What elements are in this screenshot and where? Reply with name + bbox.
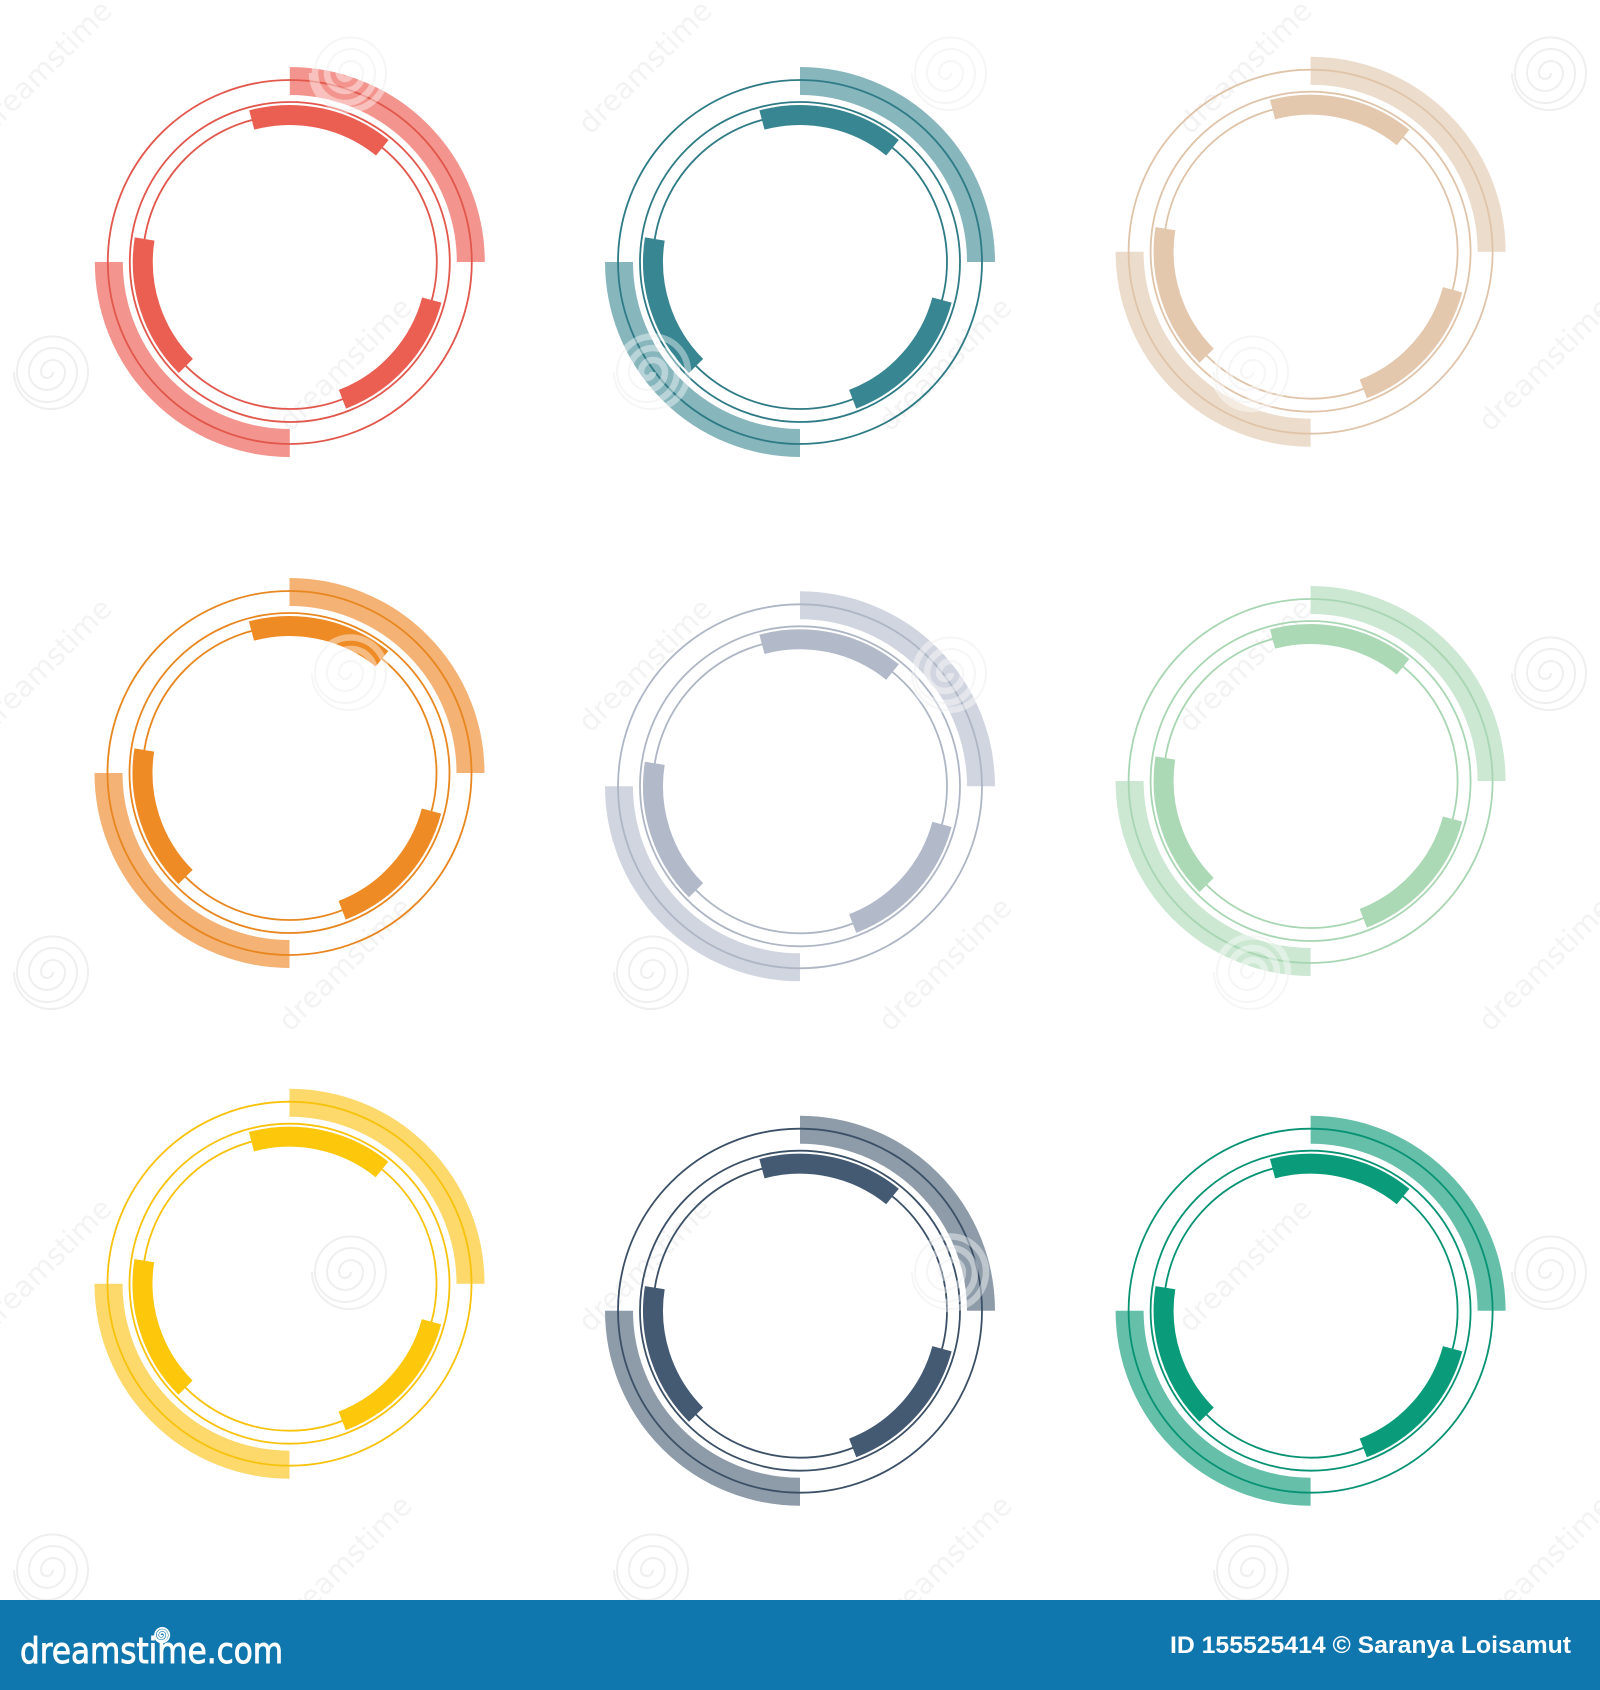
ring: navy	[618, 1129, 982, 1493]
watermark: diagonal text: dreamstime	[1171, 1191, 1319, 1339]
navy thin circles	[618, 1129, 982, 1493]
teal outer translucent bands	[619, 81, 981, 443]
footer logo spiral	[154, 1628, 169, 1642]
watermark: diagonal text: dreamstime	[271, 890, 419, 1038]
watermark: diagonal text: dreamstime	[1171, 591, 1319, 739]
light green thin circles	[1129, 599, 1493, 963]
green inner solid segments	[1164, 1164, 1453, 1448]
grey thin circles	[618, 604, 982, 968]
ring: beige	[1129, 70, 1493, 434]
ring: yellow	[108, 1102, 472, 1466]
watermark: diagonal text: dreamstime	[271, 1488, 419, 1636]
footer logo text: dreamstime.com	[20, 1631, 283, 1672]
yellow thin circles	[108, 1102, 472, 1466]
red thin circles	[108, 80, 472, 444]
ring: red	[108, 80, 472, 444]
footer credit: ID 155525414 © Saranya Loisamut	[1170, 1632, 1571, 1659]
ring: grey	[618, 604, 982, 968]
grey outer translucent bands	[619, 605, 981, 967]
light green inner solid segments	[1164, 634, 1453, 918]
red inner solid segments	[143, 115, 432, 399]
watermark: diagonal text: dreamstime	[871, 290, 1019, 438]
teal inner solid segments	[653, 115, 942, 399]
beige thin circles	[1129, 70, 1493, 434]
teal thin circles	[618, 80, 982, 444]
green thin circles	[1129, 1129, 1493, 1493]
green outer translucent bands	[1130, 1130, 1492, 1492]
orange thin circles	[108, 591, 472, 955]
ring: light green	[1129, 599, 1493, 963]
navy outer translucent bands	[619, 1130, 981, 1492]
ring: green	[1129, 1129, 1493, 1493]
footer bar	[0, 1600, 1600, 1690]
watermark: spirals over bands	[312, 38, 1288, 1309]
watermark: diagonal text: dreamstime	[271, 290, 419, 438]
yellow outer translucent bands	[108, 1103, 470, 1465]
beige inner solid segments	[1164, 105, 1453, 389]
grey inner solid segments	[653, 639, 942, 924]
yellow inner solid segments	[143, 1137, 431, 1421]
orange outer translucent bands	[108, 592, 470, 954]
beige outer translucent bands	[1130, 71, 1492, 433]
orange inner solid segments	[143, 626, 431, 910]
watermark: diagonal text: dreamstime	[571, 591, 719, 739]
light green outer translucent bands	[1130, 600, 1492, 962]
red outer translucent bands	[109, 81, 471, 443]
watermark: diagonal text: dreamstime	[871, 1488, 1019, 1636]
ring: orange	[108, 591, 472, 955]
watermark: diagonal text: dreamstime	[871, 890, 1019, 1038]
navy inner solid segments	[653, 1164, 942, 1448]
watermark: diagonal text: dreamstime	[571, 1191, 719, 1339]
ring: teal	[618, 80, 982, 444]
